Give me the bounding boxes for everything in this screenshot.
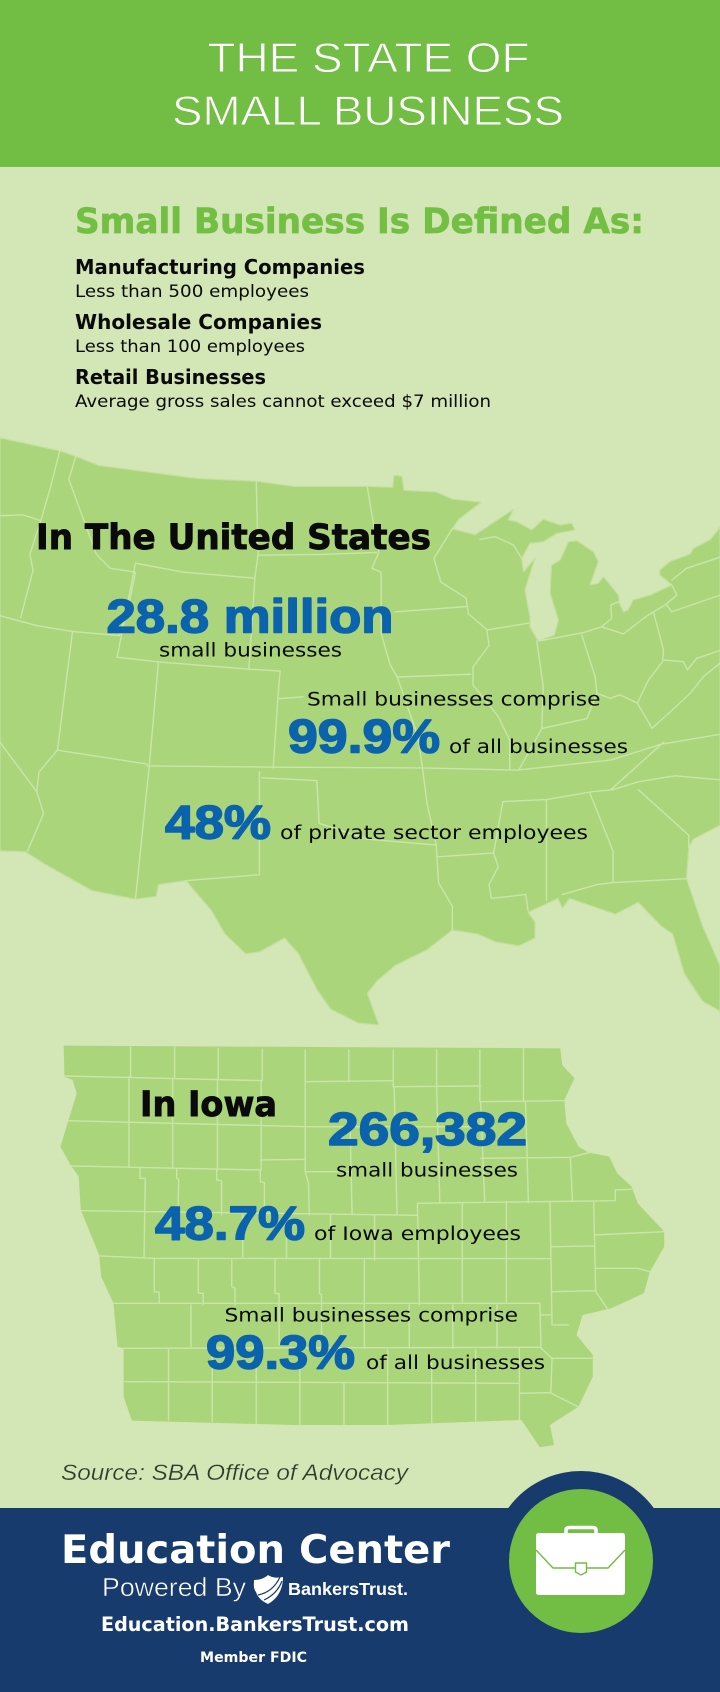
definition: retail	[75, 365, 491, 412]
footer heading: Education Center	[61, 1528, 451, 1573]
header banner	[0, 0, 720, 167]
title	[172, 34, 564, 134]
definition: wholesale	[75, 310, 322, 357]
footer panel	[0, 1471, 720, 1692]
stat: 99.3% of all businesses: of all businesses	[366, 1353, 545, 1374]
stat: 266,382 small businesses	[328, 1103, 527, 1182]
stat: 99.9% of all businesses: of all businesses	[449, 737, 628, 758]
definition: manufacturing: Manufacturing Companies	[75, 255, 365, 279]
logo: Bankers Trust shield	[254, 1575, 283, 1604]
map: United States	[0, 438, 720, 1025]
stat: 99.9% of all businesses	[288, 690, 628, 762]
member FDIC: Member FDIC	[200, 1650, 307, 1666]
stat: 48% of private sector employees: of private sector employees	[280, 823, 588, 844]
stat: 48.7% of Iowa employees: 48.7%	[155, 1196, 305, 1250]
section heading: United States: In The United States	[36, 518, 431, 558]
stat: 48.7% of Iowa employees	[155, 1196, 521, 1250]
definition: retail: Average gross sales cannot exceed $7 million	[75, 392, 491, 412]
powered by line: Powered By	[102, 1572, 246, 1602]
website: Education.BankersTrust.com	[101, 1613, 409, 1636]
stat: 48% of private sector employees	[165, 796, 588, 848]
stat: 48% of private sector employees: 48%	[165, 796, 271, 848]
section heading: Iowa: In Iowa	[140, 1085, 277, 1125]
stat: 28.8 million small businesses	[106, 590, 394, 662]
stat: 99.3% of all businesses	[206, 1306, 545, 1378]
panel: small business definition	[75, 202, 644, 412]
title: THE STATE OF	[208, 34, 530, 81]
stat: 266,382 small businesses: 266,382	[328, 1103, 527, 1155]
stat: 28.8 million small businesses: small businesses	[159, 640, 342, 662]
definition: wholesale: Less than 100 employees	[75, 337, 305, 357]
stat: 99.3% of all businesses: 99.3%	[206, 1326, 355, 1378]
stat: 99.3% of all businesses: Small businesses comprise	[224, 1306, 518, 1327]
definition heading: Small Business Is Defined As:	[75, 202, 644, 242]
title: SMALL BUSINESS	[172, 87, 564, 134]
stat: 99.9% of all businesses: Small businesses comprise	[307, 690, 600, 710]
stat: 28.8 million small businesses: 28.8 million	[106, 590, 394, 642]
logo wordmark: BankersTrust.	[288, 1579, 408, 1599]
stat: 99.9% of all businesses: 99.9%	[288, 710, 440, 762]
definition: retail: Retail Businesses	[75, 365, 266, 389]
definition: wholesale: Wholesale Companies	[75, 310, 322, 334]
definition: manufacturing	[75, 255, 365, 302]
stat: 48.7% of Iowa employees: of Iowa employees	[314, 1224, 521, 1245]
stat: 266,382 small businesses: small businesses	[336, 1161, 518, 1182]
icon: briefcase badge	[509, 1489, 653, 1633]
map: Iowa	[60, 1046, 664, 1447]
definition: manufacturing: Less than 500 employees	[75, 282, 309, 302]
source note: Source: SBA Office of Advocacy	[61, 1460, 410, 1485]
